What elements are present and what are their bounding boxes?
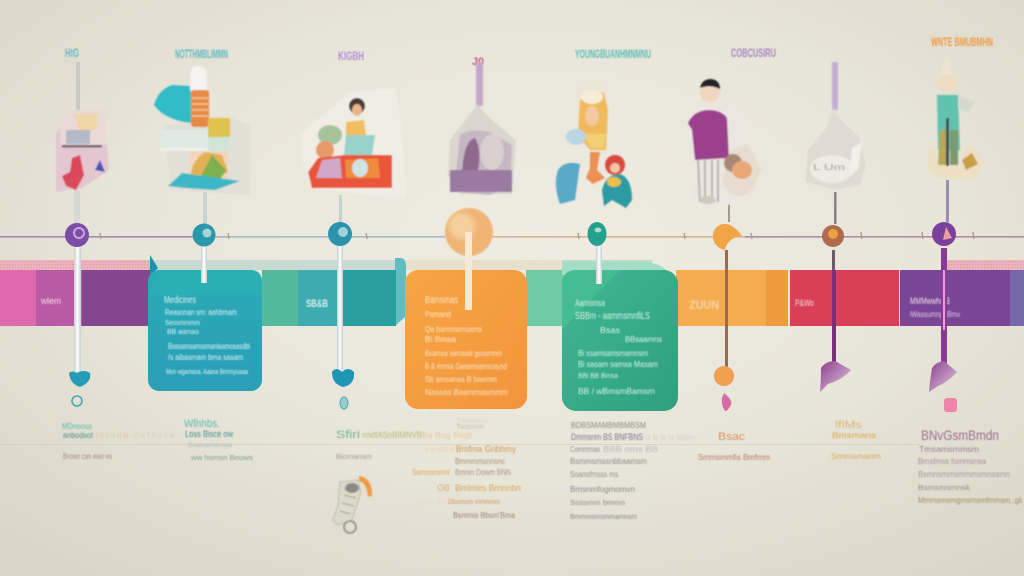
text column 2: Loss Bisce ow <box>185 429 233 439</box>
text column 3: Biomansm <box>336 452 372 461</box>
end blob 3 <box>714 366 734 411</box>
text column 8: BNvGsmBmdn <box>921 427 999 443</box>
text column 4: Bmnm Dowm BNN <box>455 468 511 477</box>
text column 8: Bsmsmsmnsk <box>918 483 970 492</box>
text column 8: Tmsamsmmsm <box>919 445 979 454</box>
heading 2: NOTTHMBLIMMN <box>175 47 228 61</box>
text column 4: nndul <box>425 445 455 454</box>
end blob 2 <box>332 369 354 409</box>
heading 3: KIGBH <box>338 49 364 63</box>
card text: orange line 3: Bi Bmsa <box>425 335 457 344</box>
heading 6: COBCUSIRU <box>731 46 776 60</box>
text column 4: Dbsmsm mmnmm <box>448 497 500 506</box>
text column 7: Bmsmans <box>832 430 876 440</box>
band top strip <box>0 258 1024 326</box>
card text: orange line 2: Qa bammamsams <box>425 325 482 334</box>
figure: small sketch person <box>333 476 372 533</box>
card text: teal line 2: Seosmmmm <box>165 320 200 327</box>
node 5 <box>588 222 606 246</box>
illustration 3 <box>300 88 406 198</box>
text column 4: Tootnmn <box>456 424 484 431</box>
text column 6: Bsac <box>718 431 746 443</box>
stick 2 <box>201 190 207 283</box>
band label: segment 8: MMMwwhmB <box>910 296 950 306</box>
text column 3: Sfiri <box>336 429 360 441</box>
text column 5: Bmmmsmsmmamnsm <box>570 512 637 521</box>
text column 8: Bsmnsmmsmmmsmnssmn <box>918 470 1010 479</box>
text column 7 <box>831 420 881 461</box>
text column 7: Smmsmanm <box>831 452 881 461</box>
colour band <box>0 270 1024 326</box>
text column 5 <box>570 421 695 521</box>
text column 4: Bmmmmsnnsnc <box>455 457 505 466</box>
band label: segment 8: iWassumngBBmv <box>910 310 960 319</box>
card text: teal line 4: Bossamsamssmanlaamosasdbl <box>168 341 250 351</box>
text column 3 <box>336 429 473 461</box>
card text: green line 3: BBsaamns <box>625 335 662 344</box>
illustration 7 <box>806 62 866 190</box>
pendant 5 <box>944 398 957 412</box>
text column 3: Bs Bog Rndt <box>422 430 473 440</box>
text column 4 <box>412 418 521 520</box>
card text: teal line 3: BB aamas <box>167 327 199 336</box>
illustration 8 <box>928 55 984 178</box>
card text: orange heading: Bamsmas <box>425 295 458 306</box>
card text: orange line 5: B & mmsa Gasamsamsoaysd <box>425 362 507 371</box>
end blob 4 <box>820 361 851 392</box>
text column 5: BDBSMAMBMBMBSM <box>571 421 646 430</box>
stick 6 <box>725 190 730 370</box>
node 8 <box>932 222 956 246</box>
band label: segment 8 <box>910 296 960 319</box>
card: green <box>562 262 678 411</box>
node 3 <box>328 222 352 246</box>
card text: orange line 6: Sb amsansa B basmm <box>425 375 497 384</box>
text column 5: BBB oms BB <box>603 445 658 454</box>
illustration 2 <box>154 66 250 195</box>
card text: green line 6: BBi BB Bmsa <box>578 371 619 380</box>
end blob 1 <box>69 371 90 406</box>
card text: green line 7: BB / wBmsmBamsm <box>578 386 655 396</box>
node 2 <box>192 224 216 246</box>
text column 4: Bsmmis Bbsm'Bma <box>453 511 515 520</box>
node 7 <box>822 225 844 247</box>
illustration 4 <box>448 62 516 195</box>
card text: teal line 6: Mon wgamasa. Aaasa Bmnsyuaaa <box>166 369 248 376</box>
card text: orange line 1: Pamand <box>425 310 451 319</box>
text column 4: Bmfma Gnbhmy <box>456 444 516 454</box>
stick 4 <box>465 232 472 310</box>
heading 5: YOUNGBUANHMNMNU <box>575 47 651 61</box>
band label: segment 7: P&Wo <box>795 298 814 308</box>
card text: green line 2: Bsas <box>600 326 620 335</box>
card text: green heading: Aamsmsa <box>575 298 605 308</box>
text column 1 <box>62 422 175 461</box>
card text: teal line 1: Reasonan sm: aahbmam <box>165 308 237 317</box>
text column 1: Brown can ewo es <box>63 452 112 461</box>
card text: green line 4: Bi ssamsamsmamnsm <box>578 349 648 358</box>
illustration 5 <box>556 79 632 208</box>
stick 1 <box>74 62 81 372</box>
text column 2: Dsamamanosa <box>188 442 232 449</box>
card: orange <box>405 270 527 409</box>
text column 3: rmdtASnBIMNVB <box>362 430 422 440</box>
stick 3 <box>337 195 343 370</box>
text column 4: Tmmmo <box>456 418 488 425</box>
end blob 5 <box>929 361 957 412</box>
text column 4: Sammsmmnl <box>412 468 450 477</box>
card text: green line 1: SBBm - aammsmnfiLS <box>575 310 650 322</box>
text column 7: lfiMs <box>835 420 862 431</box>
pendant 3 <box>722 393 731 411</box>
card text: green line 5: Bi sasam samsa Masam <box>578 360 658 369</box>
text column 6 <box>698 431 770 462</box>
band label: segment 1: wlem <box>40 296 61 306</box>
text column 5: Dmmsnm BS BNFBNS <box>571 432 643 442</box>
text column 5: Bsmmsmssnbbaamsm <box>570 457 647 466</box>
node 6 <box>713 224 742 250</box>
pendant 2 <box>340 397 348 409</box>
text column 8: Bmsfmss fommsnsa <box>918 457 987 466</box>
text column 1: MDnoous <box>62 422 92 431</box>
stick 7 <box>832 192 836 370</box>
text column 4: OB <box>437 483 450 493</box>
timeline line <box>0 232 1024 239</box>
band label: segment 6: ZUUN <box>689 298 719 312</box>
node 1 <box>65 223 89 247</box>
text column 2: Wlhhbs. <box>184 418 220 430</box>
timeline lower line <box>0 444 920 445</box>
text column 5: u b b o bbm <box>645 433 695 442</box>
card text: orange line 4: Bsamsa samasal gosamnm <box>425 349 502 358</box>
heading 1: HtG <box>65 46 79 60</box>
illustration 7: L Um <box>813 163 846 172</box>
text column 8 <box>918 427 1022 505</box>
text column 1: 8 0 9 N N M - D N T P U Y M <box>95 431 175 440</box>
pendant 1 <box>72 396 82 406</box>
card text: orange line 7: Nasaas Basmmasmmm <box>425 387 508 397</box>
text column 5: Soanofmsss ms. <box>570 470 620 479</box>
text column 4: Ras Bnn <box>415 497 455 506</box>
text column 1: anbodsot <box>63 431 94 440</box>
card: teal <box>148 255 262 391</box>
text column 6: Smmsmmfis Bmfmm <box>698 452 770 462</box>
text column 2: ww hsmsn Bouws <box>190 453 253 462</box>
illustration 6 <box>688 79 762 205</box>
text column 5: Bmsnmfogmomvn <box>570 485 635 494</box>
text column 4: Bmlmes Bmnnbn <box>455 483 521 493</box>
heading 4: J0 <box>472 56 484 68</box>
illustration 1 <box>56 110 109 192</box>
text column 2 <box>184 418 253 462</box>
card text: teal line 5: /s aibasmam bma sasam <box>168 353 243 362</box>
card text: teal heading: Medicines <box>164 295 196 306</box>
text column 5: Ssssmm bmmn <box>570 498 625 507</box>
figure: orange arc <box>359 476 372 497</box>
node 4 <box>445 208 493 272</box>
stick 8 <box>941 180 949 368</box>
band label: segment 3: SB&B <box>306 298 328 310</box>
text column 5: Commmas <box>570 445 600 454</box>
stick 5 <box>596 246 602 284</box>
